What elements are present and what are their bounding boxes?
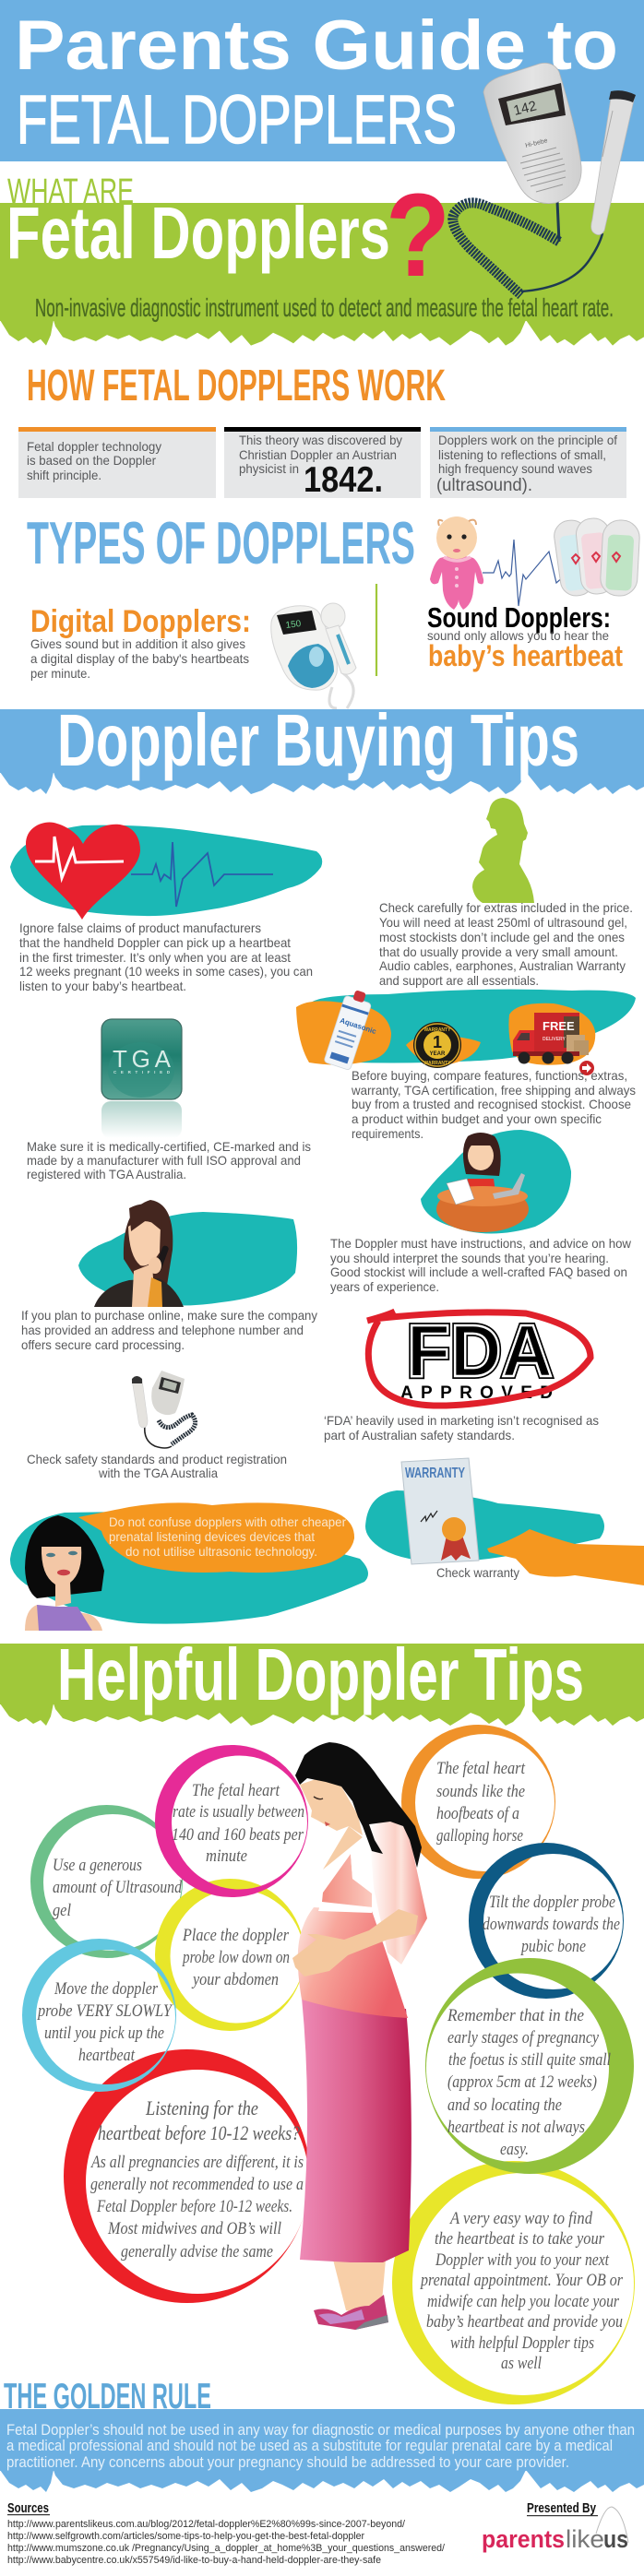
tip text: cyan ring: until you pick up the — [44, 2024, 164, 2043]
tip text: cyan ring — [36, 1979, 173, 2065]
tip 1 text: that the handheld Doppler can pick up a heartbeat — [19, 935, 291, 950]
tip 10 illustration: warranty document and pointing hand — [365, 1458, 644, 1585]
band: golden rule — [0, 2409, 644, 2492]
panel: ultrasound principle: high frequency sound waves — [438, 461, 592, 476]
tip 9 text: prenatal listening devices devices that — [109, 1529, 315, 1544]
logo: parentslikeus — [482, 2507, 628, 2553]
panel: doppler shift principle: Fetal doppler technology — [27, 439, 161, 454]
tip text: magenta ring — [172, 1781, 304, 1866]
title: Fetal Dopplers: FETAL DOPPLERS — [17, 81, 457, 158]
tip 2 text: and support are all essentials. — [379, 973, 539, 988]
icon: TGA certified badge: CERTIFIED — [113, 1070, 171, 1074]
tip text: cyan ring: probe VERY SLOWLY — [36, 2001, 173, 2021]
tip 1 text — [19, 920, 313, 993]
tip 5 text: Good stockist will include a well-crafted FAQ based on — [330, 1264, 627, 1279]
icon: digital doppler device: 150 — [285, 619, 302, 631]
heading: the golden rule: THE GOLDEN RULE — [4, 2377, 211, 2416]
question mark: ? — [386, 170, 450, 302]
tip 10 text: Check warranty — [436, 1565, 519, 1580]
panel: ultrasound principle: Dopplers work on the principle of — [438, 433, 617, 447]
text: digital dopplers: a digital display of the baby's heartbeats — [30, 651, 249, 666]
tip 1 text: in the first trimester. It’s only when you are at least — [19, 950, 291, 965]
tip text: magenta ring: 140 and 160 beats per — [172, 1825, 304, 1845]
tip text: magenta ring: rate is usually between — [173, 1802, 304, 1822]
tip text: navy ring: Tilt the doppler probe — [489, 1893, 615, 1912]
panel: ultrasound principle: listening to reflections of small, — [438, 447, 606, 462]
tip 3 text: requirements. — [352, 1126, 423, 1141]
tip text: red ring: generally advise the same — [121, 2242, 273, 2261]
tip 3 illustration: teal band with gel, warranty seal and truck: FREE — [543, 1019, 575, 1033]
tip text: yellow ring: Place the doppler — [182, 1926, 290, 1945]
divider — [376, 584, 377, 676]
green band with jagged edge — [0, 203, 644, 346]
tip 1 illustration: heart and ecg on teal blob — [10, 822, 322, 920]
tip 6 text: If you plan to purchase online, make sure the company — [21, 1308, 317, 1323]
ring: navy — [469, 1843, 624, 1999]
ring: big green — [425, 1958, 634, 2174]
tip 5 text: The Doppler must have instructions, and advice on how — [330, 1236, 632, 1251]
ecg line: baby to dopplers — [483, 540, 565, 606]
panel: ultrasound principle: (ultrasound). — [436, 476, 532, 495]
tip text: magenta ring: The fetal heart — [192, 1781, 280, 1800]
tip 3 illustration: teal band with gel, warranty seal and truck: WARRANTY — [424, 1061, 451, 1066]
icon: FDA approved, circled in red: APPROVED — [400, 1383, 553, 1403]
tip 8 text: Check safety standards and product registration — [27, 1452, 287, 1466]
icon: FDA approved, circled in red: FDA — [407, 1310, 553, 1392]
tip text: navy ring: pubic bone — [519, 1937, 586, 1956]
tip 2 text: Check carefully for extras included in the price. — [379, 900, 633, 915]
tip text: green ring — [53, 1856, 182, 1920]
tip 7 text: ‘FDA’ heavily used in marketing isn’t recognised as — [324, 1413, 599, 1428]
tip text: big green ring: the foetus is still quite small — [448, 2050, 611, 2070]
icon: baby — [430, 516, 483, 610]
tip 1 text: listen to your baby’s heartbeat. — [19, 979, 186, 993]
tip 2 text: Audio cables, earphones, Australian Warranty — [379, 958, 626, 973]
tip 8 text — [27, 1452, 287, 1480]
tip text: big green ring: easy. — [500, 2140, 529, 2159]
tip 1 text: Ignore false claims of product manufacturers — [19, 920, 261, 935]
icon: pregnant silhouette — [472, 798, 534, 903]
tip 7 text: part of Australian safety standards. — [324, 1428, 515, 1442]
tip text: big yellow ring: as well — [501, 2354, 542, 2373]
tip text: orange ring: hoofbeats of a — [436, 1804, 519, 1823]
tip 4 text: Make sure it is medically-certified, CE-marked and is — [27, 1139, 311, 1154]
ring: magenta — [155, 1745, 308, 1897]
tip 6 text: has provided an address and telephone number and — [21, 1323, 304, 1337]
presented by: Presented By — [527, 2500, 597, 2516]
tip text: big green ring: Remember that in the — [447, 2006, 584, 2025]
tip text: orange ring — [436, 1759, 526, 1846]
text: digital dopplers — [30, 636, 249, 681]
panel: discovered 1842: 1842. — [304, 460, 383, 500]
ring: orange — [401, 1725, 555, 1879]
tip 5 text: you should interpret the sounds that you’re hearing. — [330, 1251, 609, 1265]
tip text: red ring — [89, 2096, 304, 2261]
sources list: http://www.babycentre.co.uk/x557549/id-like-to-buy-a-hand-held-doppler-are-they-safe — [7, 2555, 381, 2566]
tip 6 illustration: woman on phone on teal blob — [78, 1200, 297, 1307]
tip 10 illustration: warranty document and pointing hand: WARRANTY — [405, 1466, 465, 1481]
tip 9 text: do not utilise ultrasonic technology. — [125, 1544, 317, 1559]
tip 9 text: Do not confuse dopplers with other cheaper — [109, 1514, 346, 1529]
tip text: yellow ring: your abdomen — [191, 1970, 279, 1989]
icon: small doppler — [132, 1371, 196, 1448]
tip 2 text: most stockists don’t include gel and the ones — [379, 930, 625, 944]
text: sound dopplers: sound only allows you to hear the — [427, 628, 609, 643]
tip text: green ring: amount of Ultrasound — [53, 1878, 182, 1897]
tip text: big green ring: heartbeat is not always — [447, 2118, 585, 2137]
tip 3 text: a product within budget and your own specific — [352, 1111, 602, 1126]
tip 9 illustration: teal blob with orange speech bubble and woman — [10, 1502, 368, 1631]
icon: TGA certified badge — [101, 1019, 182, 1138]
tip text: big yellow ring: Doppler with you to your next — [435, 2250, 610, 2270]
tip text: yellow ring — [181, 1926, 290, 1989]
panel: discovered 1842 — [224, 427, 421, 500]
logo: parentslikeus: us — [603, 2525, 628, 2553]
tip 3 text: Before buying, compare features, functions, extras, — [352, 1068, 627, 1083]
sources list: http://www.selfgrowth.com/articles/some-tips-to-help-you-get-the-best-fetal-doppler — [7, 2531, 364, 2542]
icon: digital doppler device — [271, 603, 356, 708]
ring: green — [30, 1805, 183, 1958]
tip 1 text: 12 weeks pregnant (10 weeks in some cases), you can — [19, 964, 313, 979]
logo: parentslikeus: like — [566, 2525, 604, 2553]
tip text: red ring: As all pregnancies are different, it is — [89, 2153, 304, 2172]
tip 7 text — [324, 1413, 599, 1442]
tip 2 text: You will need at least 250ml of ultrasound gel, — [379, 915, 627, 930]
tip text: red ring: Most midwives and OB’s will — [107, 2219, 281, 2238]
tip 5 illustration: woman at desk on teal blob — [421, 1130, 571, 1234]
tip 3 text: buy from a trusted and recognised stockist. Choose — [352, 1097, 631, 1111]
icon: TGA certified badge: TGA — [113, 1045, 172, 1073]
heading: what are: WHAT ARE — [7, 172, 134, 211]
sources heading: Sources — [7, 2500, 49, 2516]
tip text: big green ring: (approx 5cm at 12 weeks) — [447, 2072, 597, 2092]
icon: fetal doppler device with probe and coiled cord — [453, 63, 636, 295]
tip 6 text: offers secure card processing. — [21, 1337, 185, 1352]
tip 4 text: registered with TGA Australia. — [27, 1167, 186, 1181]
icon: fetal doppler device with probe and coiled cord: Hi-bebe — [525, 137, 548, 149]
tip 3 text — [351, 1068, 636, 1141]
tip 2 text — [379, 900, 633, 988]
golden rule text: practitioner. Any concerns about your pregnancy should be addressed to your care provider. — [6, 2453, 569, 2471]
tip text: green ring: Use a generous — [53, 1856, 142, 1875]
tip 4 text: made by a manufacturer with full ISO approval and — [27, 1153, 301, 1168]
tip 6 text — [21, 1308, 317, 1352]
ring: red — [64, 2049, 310, 2303]
tip 3 illustration: teal band with gel, warranty seal and truck: DELIVERY — [543, 1037, 566, 1042]
icon: FDA approved, circled in red — [367, 1310, 590, 1406]
tip text: big yellow ring: with helpful Doppler tips — [450, 2333, 594, 2353]
icon: FDA approved, circled in red: FDA — [407, 1310, 553, 1392]
ring: big yellow — [392, 2161, 635, 2404]
tip text: big green ring — [447, 2006, 611, 2159]
tip 4 text — [27, 1139, 311, 1181]
illustration: pregnant woman — [292, 1742, 427, 2330]
panel: discovered 1842: physicist in — [239, 461, 299, 476]
tip text: big yellow ring: A very easy way to find — [448, 2209, 592, 2228]
tip 3 text: warranty, TGA certification, free shipping and always — [351, 1083, 636, 1098]
panel: doppler shift principle — [18, 427, 216, 498]
logo: parentslikeus: parents — [482, 2525, 565, 2553]
icon: three sound dopplers — [552, 516, 640, 598]
heading: fetal dopplers: Fetal Dopplers — [6, 192, 390, 274]
icon: fetal doppler device with probe and coiled cord: bistos — [524, 119, 539, 127]
tip text: magenta ring: minute — [206, 1846, 247, 1866]
tip 3 illustration: teal band with gel, warranty seal and truck: YEAR — [430, 1051, 446, 1057]
tip 3 illustration: teal band with gel, warranty seal and truck: 1 — [433, 1033, 442, 1051]
tip 3 illustration: teal band with gel, warranty seal and truck: WARRANTY — [424, 1027, 451, 1033]
panel: doppler shift principle: shift principle. — [27, 468, 101, 482]
tip 3 illustration: teal band with gel, warranty seal and truck — [296, 987, 636, 1075]
tip 5 text — [330, 1236, 632, 1294]
ring: yellow — [155, 1879, 304, 2031]
header band: blue — [0, 0, 644, 161]
band: helpful doppler tips — [0, 1644, 644, 1726]
tip text: yellow ring: probe low down on — [181, 1948, 290, 1967]
tip text: big green ring: and so locating the — [447, 2095, 562, 2115]
text: digital dopplers: Gives sound but in addition it also gives — [30, 636, 245, 651]
tip text: big yellow ring: the heartbeat is to take your — [435, 2229, 605, 2249]
icon: fetal doppler device with probe and coiled cord: 142 — [512, 98, 538, 119]
tip text: orange ring: galloping horse — [436, 1826, 523, 1846]
panel: ultrasound principle — [430, 427, 626, 498]
sources list: http://www.mumszone.co.uk /Pregnancy/Using_a_doppler_at_home%3B_your_questions_answered/ — [7, 2543, 446, 2554]
panel: doppler shift principle: is based on the Doppler — [27, 453, 156, 468]
tip 8 text: with the TGA Australia — [98, 1466, 218, 1480]
text: digital dopplers: per minute. — [30, 666, 90, 681]
tip text: orange ring: The fetal heart — [436, 1759, 526, 1778]
tip text: big yellow ring — [419, 2209, 624, 2373]
band: doppler buying tips — [0, 709, 644, 794]
tip 5 text: years of experience. — [330, 1279, 439, 1294]
tip 3 illustration: teal band with gel, warranty seal and truck: Aquasonic — [339, 1016, 377, 1036]
sources list — [7, 2519, 446, 2566]
tip text: big green ring: early stages of pregnancy — [447, 2028, 599, 2048]
tip text: orange ring: sounds like the — [436, 1782, 525, 1801]
title: Parents Guide to: Parents Guide to — [15, 6, 618, 85]
golden rule text — [6, 2421, 635, 2471]
ring: cyan — [22, 1939, 176, 2092]
panel: discovered 1842: This theory was discovered by — [239, 433, 402, 447]
tip text: red ring: Listening for the — [145, 2096, 258, 2119]
tip 9 text — [109, 1514, 346, 1559]
tip text: navy ring — [483, 1893, 620, 1956]
tip text: red ring: heartbeat before 10-12 weeks? — [98, 2121, 300, 2144]
tip text: green ring: gel — [53, 1901, 71, 1920]
tip text: navy ring: downwards towards the — [483, 1915, 620, 1934]
panel: discovered 1842: Christian Doppler an Austrian — [239, 447, 397, 462]
tip 2 text: that do usually provide a very small amount. — [379, 944, 618, 959]
heading: digital dopplers: Digital Dopplers: — [30, 604, 251, 639]
tip text: red ring: generally not recommended to use a — [90, 2175, 304, 2194]
tip text: cyan ring: heartbeat — [78, 2046, 136, 2065]
tip text: cyan ring: Move the doppler — [54, 1979, 159, 1999]
sources list: http://www.parentslikeus.com.au/blog/2012/fetal-doppler%E2%80%99s-since-2007-beyond/ — [7, 2519, 406, 2530]
tip text: red ring: Fetal Doppler before 10-12 weeks. — [96, 2197, 292, 2216]
